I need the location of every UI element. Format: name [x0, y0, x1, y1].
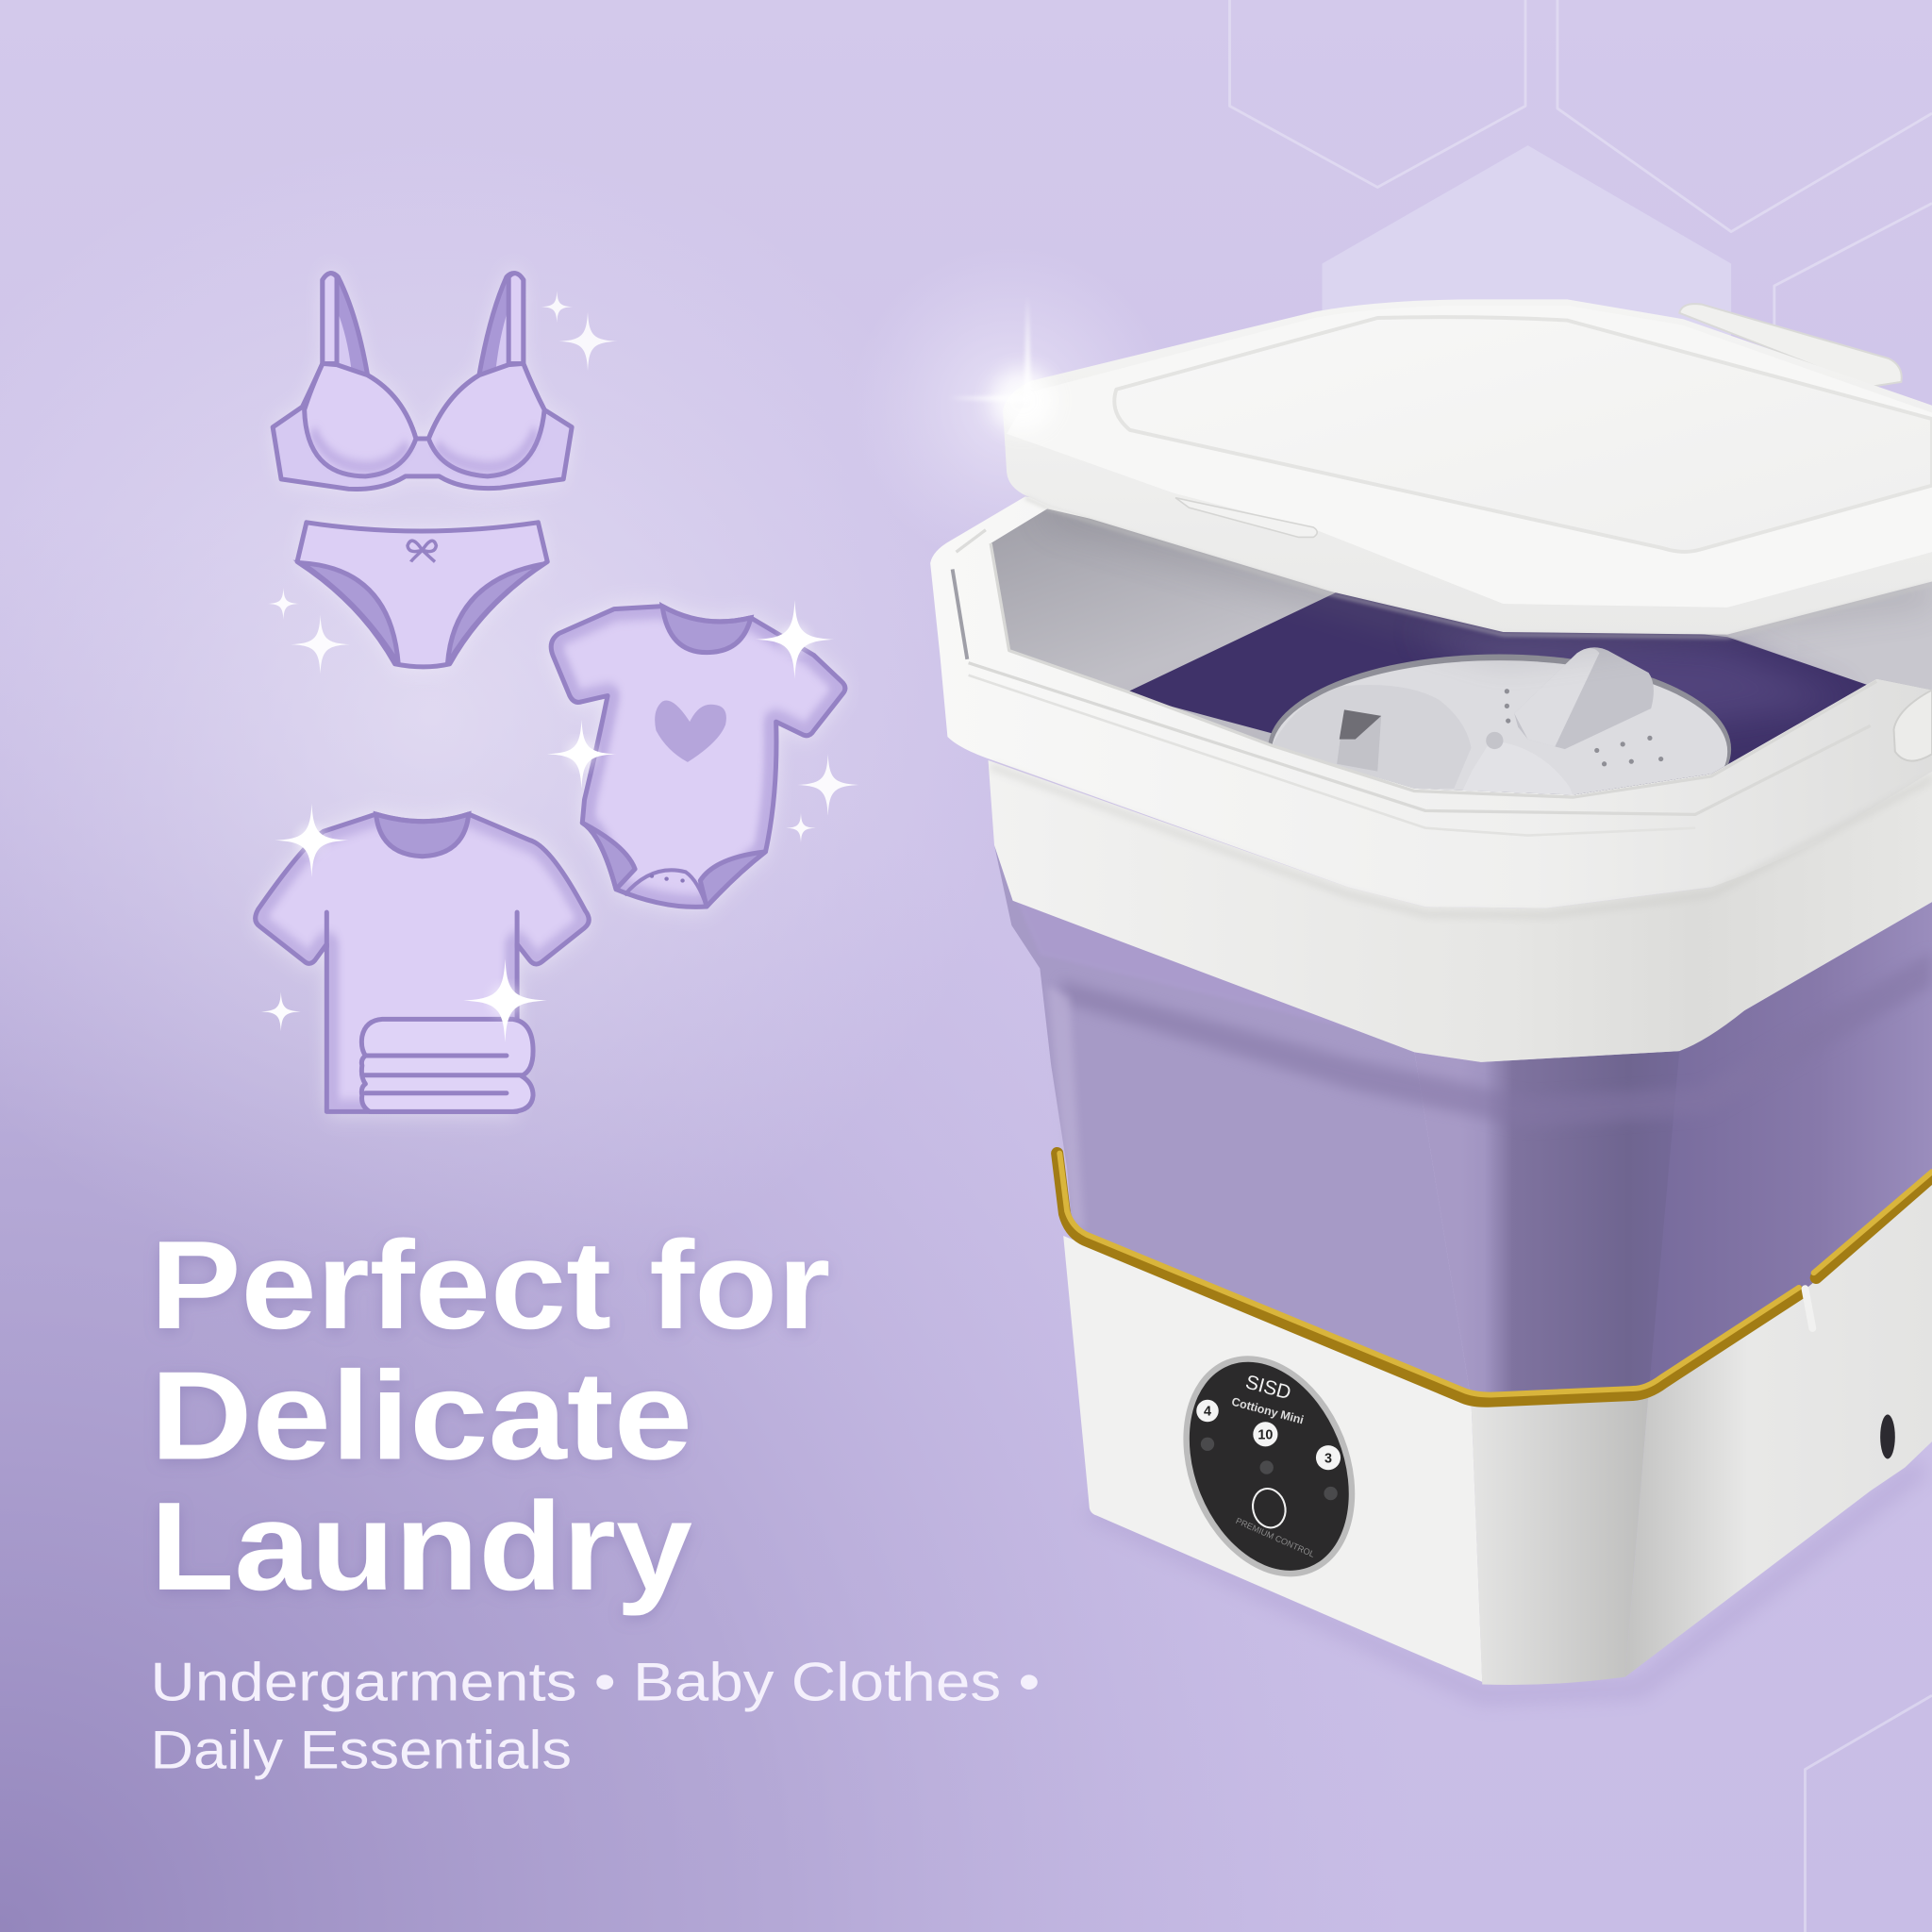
lid body — [1003, 299, 1932, 635]
icon: baby onesie — [551, 607, 845, 907]
icon: underwear — [297, 523, 547, 667]
ground shadow — [1090, 1466, 1923, 1694]
onesie inner shading — [551, 607, 845, 907]
sparkle on lid — [949, 295, 1055, 432]
onesie leg openings — [582, 823, 765, 907]
interior right wall — [1727, 581, 1932, 690]
icon: bow — [408, 541, 436, 561]
band top shadow — [991, 766, 1932, 915]
lid underside edge — [1025, 498, 1932, 637]
base: white housing — [1063, 1184, 1932, 1685]
onesie snap flap — [625, 870, 707, 907]
panel power ring — [1248, 1485, 1290, 1531]
title: Perfect for — [150, 1215, 830, 1356]
agitator disk — [1268, 647, 1732, 794]
onesie neckline — [662, 607, 751, 653]
agitator window — [1337, 716, 1381, 772]
shirt inner shading — [256, 814, 589, 1111]
panel button 10: 10 — [1257, 1428, 1273, 1443]
sparkles around garments — [261, 291, 858, 1042]
subtitle — [150, 1652, 1040, 1780]
lid latch tab — [1175, 498, 1317, 537]
bra back straps — [335, 277, 509, 375]
panel button 4 — [1196, 1400, 1219, 1422]
icon: drain hole — [1880, 1414, 1895, 1458]
lid — [1003, 299, 1932, 637]
gold trim ring — [1058, 1154, 1932, 1401]
agitator fin right — [1514, 647, 1654, 749]
panel brand: SISD — [1243, 1372, 1293, 1404]
lid recess — [1114, 317, 1932, 552]
agitator fin left — [1272, 685, 1472, 789]
onesie snaps — [650, 874, 685, 883]
rim inner edge lines — [953, 530, 1876, 836]
control panel: Cottiony Mini — [1230, 1395, 1305, 1426]
white upper band — [989, 760, 1932, 1062]
folded towels — [361, 1019, 533, 1111]
title: Laundry — [150, 1476, 692, 1617]
agitator fin center — [1462, 791, 1572, 794]
control panel — [1152, 1330, 1387, 1603]
washing machine — [930, 295, 1932, 1694]
body crease shadow — [1059, 951, 1932, 1127]
side handle — [1894, 690, 1932, 761]
subtitle: Undergarments • Baby Clothes • — [150, 1652, 1040, 1712]
lid top surface — [1007, 306, 1932, 608]
interior lid shadow — [1047, 508, 1932, 647]
tub rim — [930, 496, 1932, 908]
icon: heart — [655, 701, 726, 762]
hinge — [1679, 304, 1902, 387]
panel button 3: 3 — [1324, 1451, 1332, 1466]
collapsible purple body — [994, 845, 1932, 1401]
agitator holes — [1505, 689, 1663, 766]
icon: t-shirt with folded towels — [256, 814, 589, 1111]
tub interior — [991, 509, 1932, 794]
bra right cup — [428, 363, 544, 476]
title — [150, 1215, 830, 1617]
subtitle: Daily Essentials — [150, 1720, 572, 1780]
panel footer text: PREMIUM CONTROL — [1234, 1516, 1316, 1559]
shirt neckline — [376, 814, 469, 857]
panel button 4: 4 — [1204, 1405, 1211, 1420]
bra left cup — [305, 363, 416, 476]
body left highlight — [1047, 986, 1084, 1232]
panel button 10 — [1253, 1422, 1277, 1446]
icon: bra — [273, 274, 572, 490]
underwear leg openings — [302, 563, 543, 664]
purple drum liner — [1124, 592, 1875, 813]
bra strap fronts — [323, 274, 524, 363]
panel indicator lights — [1201, 1438, 1338, 1500]
shirt sleeve seams — [326, 912, 517, 947]
panel button 3 — [1316, 1445, 1341, 1470]
body upper pleat — [1001, 862, 1491, 1062]
decorative hexagon outlines — [1230, 0, 1932, 1932]
title: Delicate — [150, 1345, 692, 1486]
